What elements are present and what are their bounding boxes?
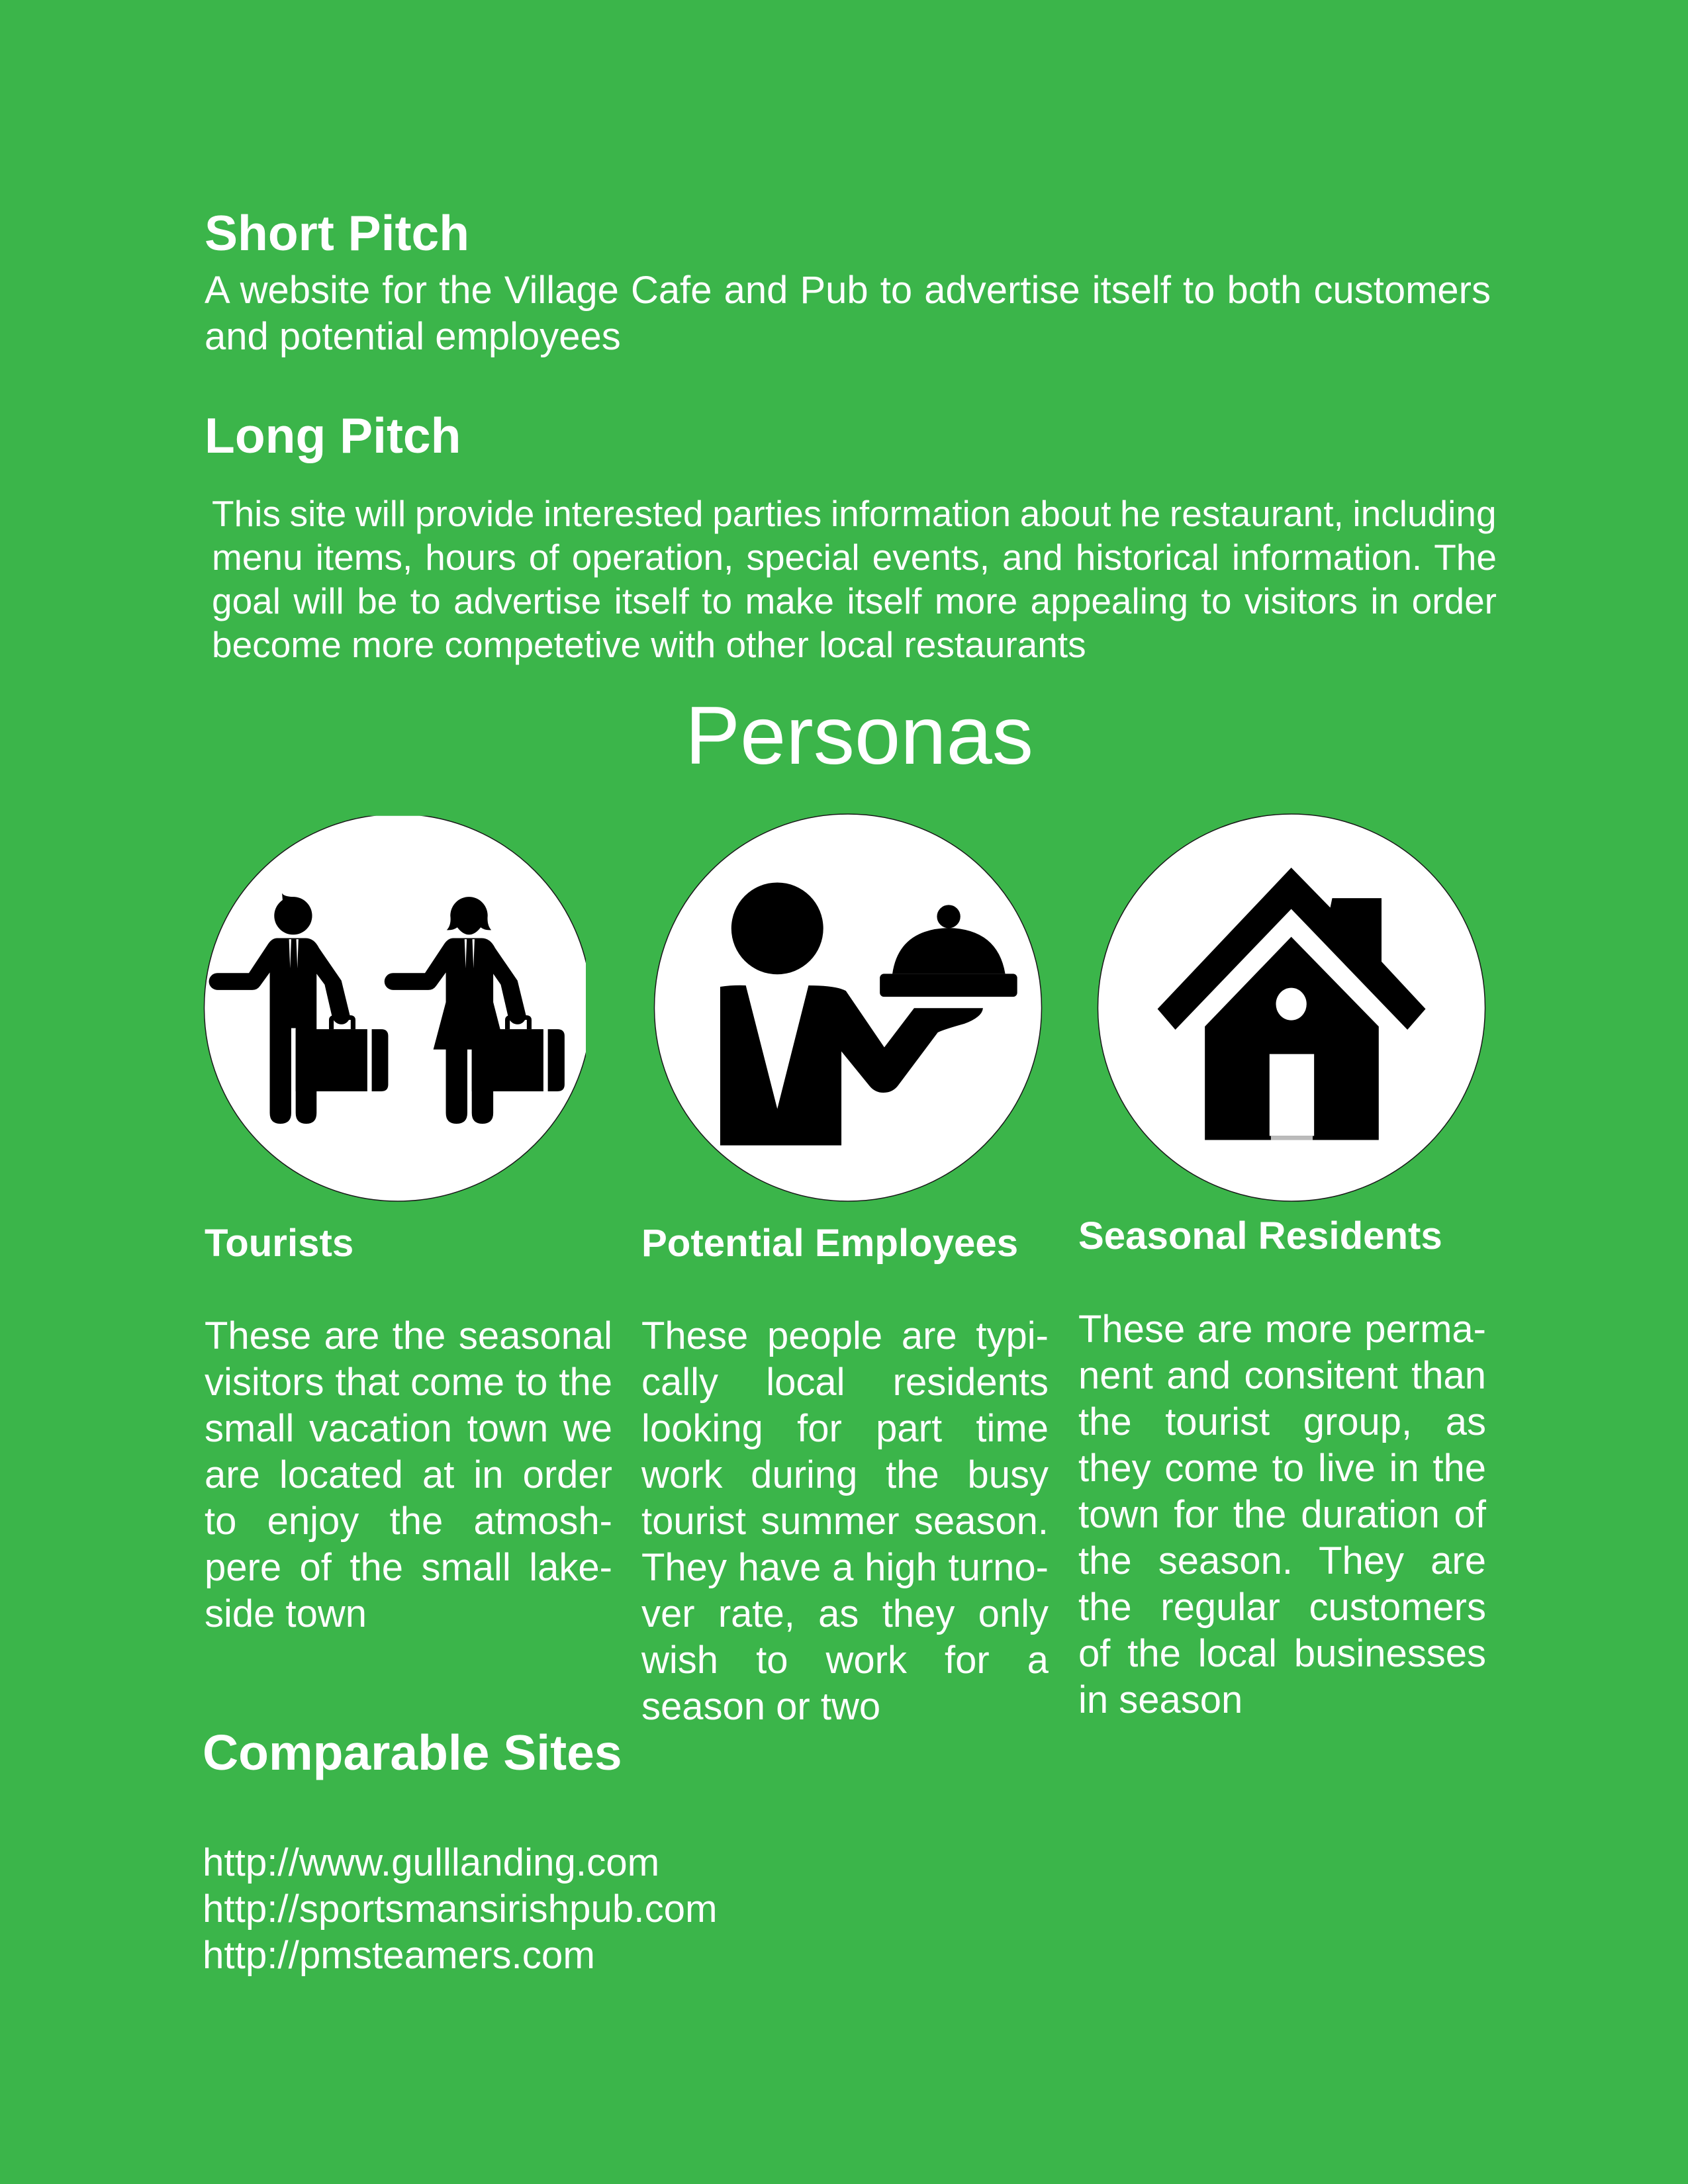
icon: house bbox=[1098, 813, 1485, 1202]
house body bbox=[1205, 937, 1379, 1140]
waiter bbox=[731, 882, 823, 974]
panel: personas bbox=[204, 690, 1487, 1728]
heading: short pitch: Short Pitch bbox=[205, 205, 469, 261]
text: short pitch description: and potential employees bbox=[205, 315, 621, 358]
text: short pitch description: A website for the Village Cafe and Pub to advertise itself to both customers bbox=[205, 269, 1491, 312]
persona text: potential employees: They have a high turno- bbox=[641, 1546, 1049, 1589]
persona text: potential employees: tourist summer season. bbox=[641, 1500, 1049, 1543]
man bbox=[274, 897, 312, 934]
persona text: seasonal residents: in season bbox=[1078, 1678, 1243, 1721]
persona text: seasonal residents: the tourist group, as bbox=[1078, 1400, 1486, 1443]
persona text: potential employees: looking for part time bbox=[641, 1407, 1049, 1450]
persona card: tourists bbox=[204, 815, 612, 1635]
heading: comparable sites: Comparable Sites bbox=[203, 1725, 622, 1780]
persona text: potential employees: work during the busy bbox=[641, 1453, 1049, 1496]
roof and chimney bbox=[1158, 868, 1426, 1030]
persona text: seasonal residents bbox=[1078, 1308, 1487, 1721]
persona text: tourists: side town bbox=[205, 1592, 367, 1635]
persona text: seasonal residents: These are more perma- bbox=[1078, 1308, 1486, 1351]
woman bbox=[447, 897, 491, 934]
persona text: potential employees: wish to work for a bbox=[641, 1639, 1049, 1682]
persona text: potential employees: ver rate, as they only bbox=[641, 1592, 1049, 1635]
persona text: seasonal residents: nent and consitent than bbox=[1078, 1354, 1486, 1397]
persona heading: potential employees: Potential Employees bbox=[641, 1222, 1018, 1265]
text: list of comparable site addresses bbox=[203, 1841, 718, 1977]
panel: comparable sites bbox=[203, 1725, 718, 1977]
cloche bbox=[937, 905, 961, 928]
persona text: potential employees: cally local residents bbox=[641, 1361, 1049, 1404]
persona text: potential employees: season or two bbox=[641, 1685, 880, 1728]
persona text: seasonal residents: town for the duration of bbox=[1078, 1493, 1486, 1536]
persona text: tourists: are located at in order bbox=[205, 1453, 612, 1496]
text: long pitch description bbox=[212, 493, 1497, 665]
persona text: tourists: These are the seasonal bbox=[205, 1314, 612, 1357]
persona text: tourists: to enjoy the atmosh- bbox=[205, 1500, 612, 1543]
persona text: potential employees: These people are typi- bbox=[641, 1314, 1049, 1357]
persona text: seasonal residents: of the local businesses bbox=[1078, 1632, 1486, 1675]
persona text: tourists: visitors that come to the bbox=[205, 1361, 612, 1404]
text: list of comparable site addresses: http://pmsteamers.com bbox=[203, 1934, 595, 1977]
persona card: seasonal residents bbox=[1078, 813, 1487, 1721]
persona card: potential employees bbox=[641, 813, 1049, 1728]
text: short pitch description bbox=[205, 269, 1491, 358]
heading: long pitch: Long Pitch bbox=[205, 408, 461, 463]
persona text: potential employees bbox=[641, 1314, 1049, 1728]
panel: long pitch bbox=[205, 408, 1497, 665]
panel: short pitch bbox=[205, 205, 1491, 358]
persona text: tourists bbox=[205, 1314, 612, 1635]
icon: waiter with serving tray bbox=[654, 813, 1042, 1202]
persona text: seasonal residents: the season. They are bbox=[1078, 1539, 1486, 1582]
icon: tourists with suitcases bbox=[204, 815, 586, 1202]
persona heading: seasonal residents: Seasonal Residents bbox=[1078, 1214, 1442, 1257]
persona heading: tourists: Tourists bbox=[205, 1222, 353, 1265]
heading: personas: Personas bbox=[685, 690, 1033, 782]
text: long pitch description: become more competetive with other local restaurants bbox=[212, 624, 1086, 665]
text: long pitch description: This site will provide interested parties information about he restaurant, including bbox=[212, 493, 1497, 534]
text: long pitch description: menu items, hours of operation, special events, and historical information. The bbox=[212, 537, 1497, 578]
text: long pitch description: goal will be to advertise itself to make itself more appealing to visitors in order bbox=[212, 580, 1497, 621]
text: list of comparable site addresses: http://www.gulllanding.com bbox=[203, 1841, 659, 1884]
persona text: seasonal residents: the regular customers bbox=[1078, 1586, 1486, 1629]
persona text: tourists: small vacation town we bbox=[205, 1407, 612, 1450]
persona text: tourists: pere of the small lake- bbox=[205, 1546, 612, 1589]
text: list of comparable site addresses: http://sportsmansirishpub.com bbox=[203, 1888, 718, 1931]
persona text: seasonal residents: they come to live in the bbox=[1078, 1447, 1486, 1490]
